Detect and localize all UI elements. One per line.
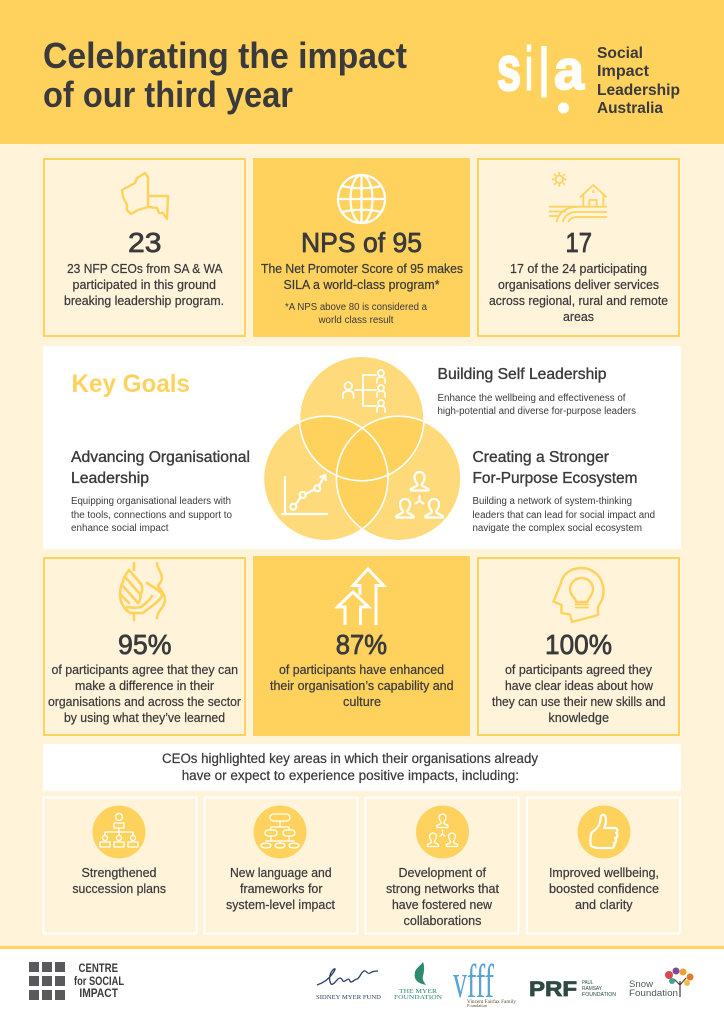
goal: advancing organisational leadership: enhance social impact bbox=[71, 523, 169, 534]
goal: for-purpose ecosystem bbox=[472, 449, 655, 534]
logo: SILA: i bbox=[525, 35, 533, 104]
icon: globe bbox=[338, 175, 385, 223]
text: succession plans: Strengthened bbox=[82, 866, 157, 880]
text: 100% description: they can use their new skills and bbox=[492, 695, 666, 709]
text: new language: New language and bbox=[230, 866, 332, 880]
logo: Paul Ramsay Foundation: FOUNDATION bbox=[582, 992, 616, 998]
title bbox=[43, 35, 407, 115]
text: 95% description bbox=[48, 663, 241, 725]
text: 95% description: make a difference in their bbox=[75, 679, 214, 693]
text: 17 description: organisations deliver services bbox=[498, 278, 659, 292]
panel: succession plans bbox=[44, 798, 196, 934]
text: wellbeing: boosted confidence bbox=[549, 882, 659, 896]
logo: SILA: Impact bbox=[597, 63, 650, 80]
logo: SILA bbox=[497, 34, 680, 117]
panel: 100 percent bbox=[478, 558, 679, 735]
text: NPS footnote: *A NPS above 80 is considered a bbox=[285, 302, 428, 313]
goal: building self leadership: Building Self Leadership bbox=[438, 366, 606, 383]
icon: thumbs up bbox=[578, 806, 630, 858]
panel: NPS of 95 bbox=[253, 158, 470, 337]
icon: org chart people bbox=[92, 806, 146, 858]
text: 23 description bbox=[64, 262, 224, 308]
goal: advancing organisational leadership: Leadership bbox=[71, 470, 149, 487]
text: 100% description bbox=[492, 663, 666, 725]
logo: Centre for Social Impact: CENTRE bbox=[78, 963, 118, 975]
logo: The Myer Foundation: FOUNDATION bbox=[394, 994, 442, 1001]
footer bbox=[0, 946, 724, 1024]
text: 23 description: 23 NFP CEOs from SA & WA bbox=[67, 262, 223, 276]
text: new language bbox=[226, 866, 336, 912]
text: 23 description: participated in this ground bbox=[72, 278, 216, 292]
goal: building self leadership: Enhance the wellbeing and effectiveness of bbox=[438, 393, 626, 404]
text: wellbeing: and clarity bbox=[575, 898, 633, 912]
stat: 87%: 87% bbox=[336, 629, 387, 660]
goal: advancing organisational leadership: Advancing Organisational bbox=[71, 449, 250, 466]
banner: CEOs highlighted: CEOs highlighted key areas in which their organisations already bbox=[162, 751, 538, 766]
text: NPS description bbox=[261, 262, 463, 292]
text: 100% description: knowledge bbox=[548, 711, 609, 725]
text: succession plans bbox=[72, 866, 166, 896]
logo: Centre for Social Impact: IMPACT bbox=[79, 988, 118, 1000]
text: succession plans: succession plans bbox=[72, 882, 166, 896]
stat: 100%: 100% bbox=[545, 629, 612, 660]
logo: SILA: Social bbox=[597, 45, 643, 62]
header band bbox=[0, 0, 724, 144]
text: 87% description: culture bbox=[343, 695, 381, 709]
icon: supporting hands bbox=[120, 563, 165, 620]
panel: wellbeing bbox=[527, 798, 680, 934]
text: 87% description bbox=[270, 663, 454, 709]
logo: Centre for Social Impact: for SOCIAL bbox=[74, 976, 124, 988]
text: NPS footnote bbox=[285, 302, 428, 326]
logo: Vincent Fairfax Family Foundation: Vincent Fairfax Family bbox=[467, 1000, 517, 1005]
panel: strong networks bbox=[366, 798, 518, 934]
logo: Vincent Fairfax Family Foundation: vfff bbox=[453, 955, 494, 1008]
text: new language: frameworks for bbox=[240, 882, 322, 896]
goal: for-purpose ecosystem: Creating a Stronger bbox=[472, 449, 609, 466]
icon: network people bbox=[416, 806, 469, 858]
goal: for-purpose ecosystem: leaders that can lead for social impact and bbox=[472, 510, 655, 521]
logo: Sidney Myer Fund: SIDNEY MYER FUND bbox=[316, 995, 382, 1001]
goal: building self leadership bbox=[438, 366, 636, 417]
logo: SILA: l bbox=[539, 34, 549, 112]
panel: 87 percent bbox=[253, 556, 470, 736]
text: 17 description bbox=[489, 262, 668, 324]
banner: CEOs highlighted bbox=[43, 744, 681, 791]
logo: Snow Foundation bbox=[629, 968, 694, 998]
text: NPS footnote: world class result bbox=[318, 315, 394, 326]
panel: new language bbox=[204, 798, 358, 934]
icon: network of people bbox=[396, 472, 443, 518]
panel: 23 CEOs bbox=[44, 159, 245, 336]
text: 95% description: by using what they’ve learned bbox=[64, 711, 225, 725]
text: wellbeing bbox=[549, 866, 659, 912]
goal: advancing organisational leadership: the tools, connections and support to bbox=[71, 510, 233, 521]
text: 100% description: of participants agreed they bbox=[505, 663, 653, 677]
text: 100% description: have clear ideas about how bbox=[505, 679, 654, 693]
banner: CEOs highlighted: have or expect to experience positive impacts, including: bbox=[182, 768, 519, 783]
icon: sun and farm bbox=[549, 172, 607, 222]
logo: SILA: a bbox=[554, 38, 585, 101]
text: 87% description: their organisation’s capability and bbox=[270, 679, 454, 693]
text: wellbeing: Improved wellbeing, bbox=[549, 866, 659, 880]
icon: self leadership tree bbox=[343, 370, 385, 412]
icon: map of WA and SA bbox=[122, 173, 168, 219]
text: 17 description: areas bbox=[563, 310, 594, 324]
logo: Paul Ramsay Foundation: PAUL bbox=[582, 980, 593, 986]
logo: Paul Ramsay Foundation bbox=[529, 978, 616, 1001]
logo: Centre for Social Impact bbox=[29, 962, 124, 1000]
text: NPS description: The Net Promoter Score of 95 makes bbox=[261, 262, 463, 276]
icon: framework flowchart bbox=[254, 806, 306, 858]
text: 23 description: breaking leadership program. bbox=[64, 294, 224, 308]
goal: for-purpose ecosystem: For-Purpose Ecosystem bbox=[472, 470, 638, 487]
text: 17 description: across regional, rural and remote bbox=[489, 294, 668, 308]
stat: NPS of 95: NPS of 95 bbox=[301, 227, 422, 258]
logo: Snow Foundation: Snow bbox=[629, 979, 654, 989]
logo: The Myer Foundation bbox=[394, 962, 442, 1001]
text: strong networks: strong networks that bbox=[386, 882, 500, 896]
goal: advancing organisational leadership: Equipping organisational leaders with bbox=[71, 496, 231, 507]
logo: The Myer Foundation: THE MYER bbox=[399, 988, 438, 995]
goal: for-purpose ecosystem: Building a network of system-thinking bbox=[472, 496, 632, 507]
icon: rising arrows bbox=[338, 569, 384, 625]
panel: 95 percent bbox=[44, 558, 245, 735]
stat: 23: 23 bbox=[128, 227, 162, 258]
logo: Paul Ramsay Foundation: RAMSAY bbox=[582, 986, 603, 992]
text: 95% description: of participants agree that they can bbox=[52, 663, 238, 677]
text: strong networks bbox=[386, 866, 500, 928]
text: strong networks: have fostered new bbox=[392, 898, 493, 912]
goal: for-purpose ecosystem: navigate the complex social ecosystem bbox=[472, 523, 642, 534]
stat: 95%: 95% bbox=[118, 629, 172, 660]
logo: SILA: Leadership bbox=[597, 82, 680, 99]
text: 87% description: of participants have enhanced bbox=[279, 663, 444, 677]
logo: Snow Foundation: Foundation bbox=[629, 988, 678, 998]
text: strong networks: collaborations bbox=[404, 914, 482, 928]
panel: key goals bbox=[43, 346, 681, 549]
icon: growth chart bbox=[282, 475, 327, 514]
icon: head with lightbulb bbox=[554, 568, 604, 622]
logo: Sidney Myer Fund bbox=[316, 969, 382, 1001]
goal: advancing organisational leadership bbox=[71, 449, 250, 534]
stat: 17: 17 bbox=[566, 227, 592, 258]
logo: SILA: s bbox=[497, 35, 521, 104]
logo: Vincent Fairfax Family Foundation: Foundation bbox=[467, 1003, 487, 1008]
title: Celebrating the impact bbox=[43, 35, 407, 76]
text: 95% description: organisations and across the sector bbox=[48, 695, 241, 709]
logo: Paul Ramsay Foundation: PRF bbox=[529, 978, 577, 1001]
text: 17 description: 17 of the 24 participating bbox=[510, 262, 647, 276]
logo: SILA: Australia bbox=[597, 100, 663, 117]
text: NPS description: SILA a world-class program* bbox=[284, 278, 440, 292]
title: of our third year bbox=[43, 74, 293, 115]
venn diagram bbox=[263, 356, 461, 541]
text: strong networks: Development of bbox=[398, 866, 487, 880]
goal: building self leadership: high-potential and diverse for-purpose leaders bbox=[438, 406, 636, 417]
panel: 17 organisations bbox=[478, 159, 679, 336]
heading: Key Goals: Key Goals bbox=[72, 370, 190, 398]
text: new language: system-level impact bbox=[226, 898, 336, 912]
